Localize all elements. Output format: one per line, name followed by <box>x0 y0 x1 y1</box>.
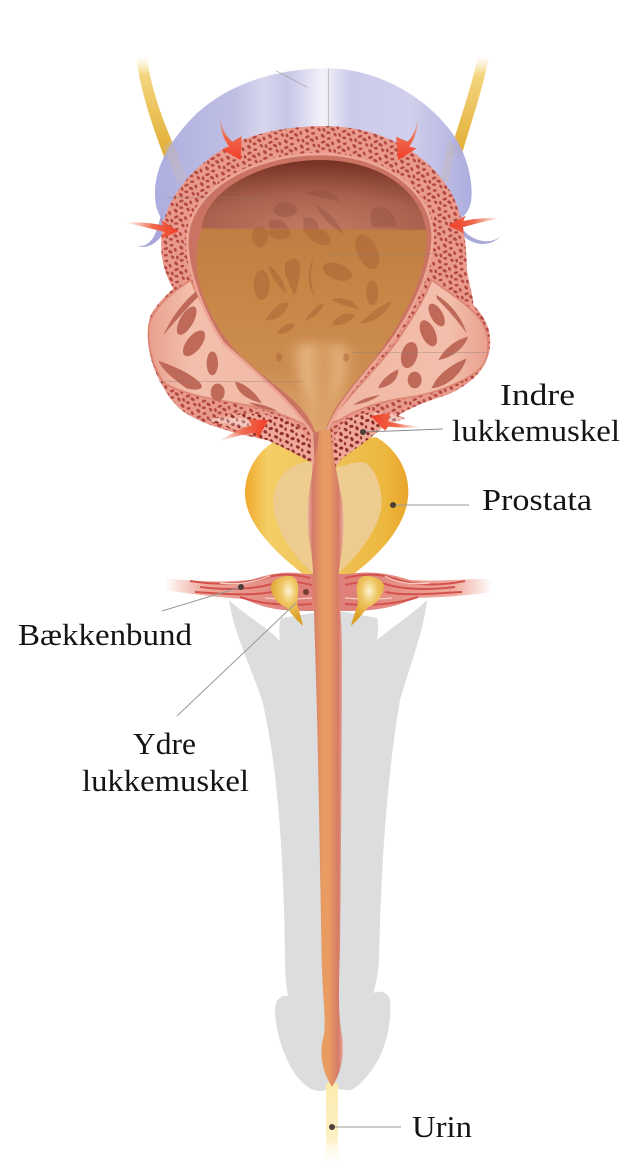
ureter through peritoneum, right <box>440 140 455 183</box>
text ydre: Ydre <box>133 726 196 761</box>
leader line urin <box>332 1126 401 1128</box>
faint internal leader lines <box>158 68 488 382</box>
ureter left <box>136 56 178 162</box>
urine in bladder <box>197 228 427 432</box>
inner sphincter right <box>333 412 405 468</box>
leader dot <box>390 502 396 508</box>
pelvic floor muscle <box>165 573 492 611</box>
leader dot <box>238 584 244 590</box>
leader dot <box>303 589 309 595</box>
text lukkemuskel: lukkemuskel <box>82 763 249 798</box>
urethra <box>308 430 343 1087</box>
red arrow lower right <box>371 413 422 431</box>
leader line indre lukkemuskel <box>363 429 443 432</box>
light lobe right <box>328 280 488 423</box>
red arrow lower left <box>220 419 268 441</box>
text prostata: Prostata <box>482 482 592 517</box>
bladder lumen lining <box>187 154 433 483</box>
white-edged patch left <box>208 418 267 432</box>
external sphincter left <box>271 576 303 626</box>
label: indre lukkemuskel <box>360 377 620 448</box>
label: ydre lukkemuskel <box>82 589 309 798</box>
ureter right <box>449 56 489 160</box>
prostate <box>245 437 408 584</box>
peritoneum dome <box>155 68 472 220</box>
leader line baekkenbund <box>162 587 241 611</box>
detrusor muscle wall <box>148 126 490 468</box>
red arrow upper left <box>220 113 242 160</box>
folds in left lobe <box>158 292 278 412</box>
label: prostata <box>390 482 592 517</box>
text baekkenbund: Bækkenbund <box>18 617 193 652</box>
bladder lumen empty upper part <box>202 160 426 230</box>
leader line prostata <box>393 504 469 506</box>
label: baekkenbund <box>18 584 244 652</box>
red arrow upper right <box>396 115 418 160</box>
leader line ydre lukkemuskel <box>177 603 296 716</box>
prostate inner left lobe <box>273 462 317 573</box>
inner sphincter left <box>208 414 313 463</box>
bladder neck highlight <box>283 342 362 430</box>
prostate inner right lobe <box>332 462 382 573</box>
external sphincter right <box>351 576 384 626</box>
red arrow middle right <box>448 216 500 233</box>
folds in right lobe <box>353 295 468 405</box>
peritoneum edge left <box>137 210 165 247</box>
light lobe left <box>149 280 320 428</box>
bladder illustration <box>127 68 500 483</box>
text urin: Urin <box>412 1109 473 1144</box>
mucosal folds above urine <box>268 191 397 234</box>
urine stream <box>326 1083 338 1168</box>
mucosal folds under urine <box>252 226 392 362</box>
penis silhouette <box>229 600 427 1091</box>
white-edged patch right <box>373 413 403 427</box>
ureter through peritoneum, left <box>163 140 187 183</box>
prostate outer capsule <box>245 437 408 584</box>
text indre: Indre <box>500 377 575 412</box>
leader dot <box>329 1124 335 1130</box>
red arrow middle left <box>127 219 178 239</box>
text lukkemuskel: lukkemuskel <box>452 413 620 448</box>
peritoneum edge right <box>463 230 500 244</box>
label: urin <box>329 1109 473 1144</box>
leader dot <box>360 429 366 435</box>
